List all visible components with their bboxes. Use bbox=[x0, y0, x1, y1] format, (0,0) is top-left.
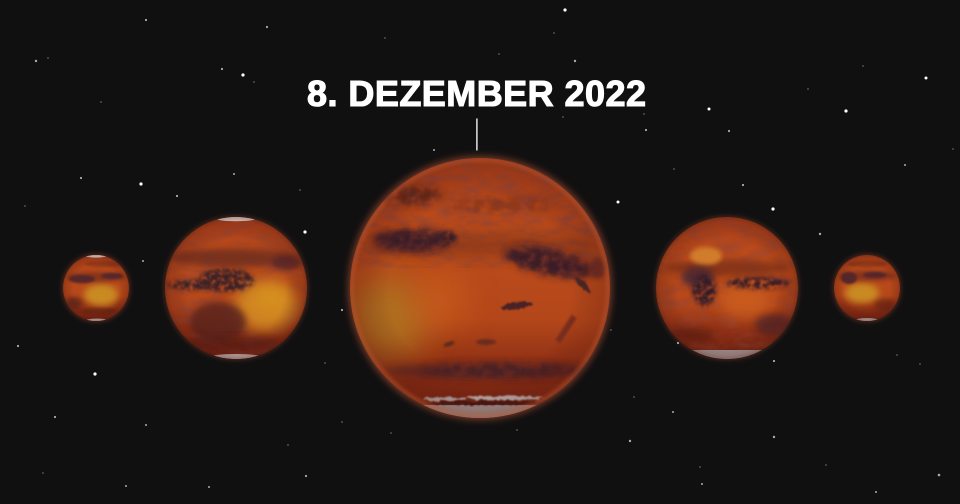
title: 8. DEZEMBER 2022 bbox=[307, 73, 646, 114]
pointer line bbox=[476, 118, 478, 150]
south polar ice bbox=[423, 394, 543, 418]
planet: large centre bbox=[340, 156, 620, 425]
planet: medium left bbox=[164, 216, 308, 360]
canyons and spots bbox=[501, 301, 533, 311]
planet: small right bbox=[832, 254, 902, 323]
planet: medium right bbox=[654, 216, 800, 362]
southern band bbox=[385, 363, 595, 379]
planet: small left bbox=[62, 254, 130, 323]
yellow region bbox=[348, 278, 428, 358]
dark bands bbox=[365, 233, 615, 257]
